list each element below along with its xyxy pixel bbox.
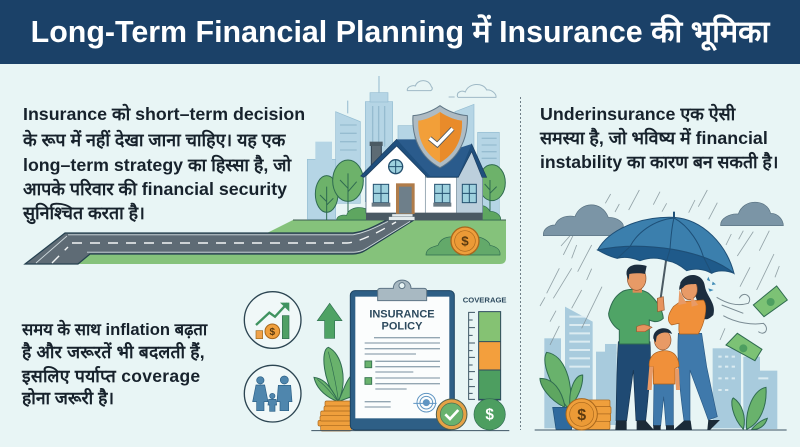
lawn and road — [25, 220, 506, 264]
illustration: family under umbrella in rain: $ — [577, 407, 586, 424]
text block: left bottom: होना जरूरी है। — [22, 388, 114, 408]
flying banknotes — [726, 286, 787, 361]
seal — [413, 393, 437, 412]
text block: left bottom: इसलिए पर्याप्त coverage — [22, 366, 200, 386]
icon: up arrow — [317, 303, 342, 338]
text block: left bottom — [22, 320, 208, 408]
skyline — [307, 93, 499, 219]
text block: right top: Underinsurance एक ऐसी — [540, 104, 735, 124]
text block: left top: Insurance को short–term decision — [23, 104, 305, 124]
coin stack — [318, 401, 352, 431]
text block: right top: instability का कारण बन सकती है। — [540, 152, 778, 172]
check badge — [436, 399, 467, 430]
skyline — [544, 307, 777, 429]
child — [647, 328, 680, 430]
text block: left top: के रूप में नहीं देखा जाना चाहिए। यह एक — [23, 130, 285, 150]
illustration: growth and family icons, clipboard and coverage gauge — [244, 280, 509, 431]
illustration: family under umbrella in rain — [535, 190, 787, 430]
trees — [315, 160, 505, 220]
woman — [668, 275, 720, 430]
text block: left bottom: है और जरूरतें भी बदलती हैं, — [22, 342, 205, 362]
wind lines — [717, 294, 766, 333]
clipboard — [350, 291, 454, 430]
title: Long-Term Financial Planning में Insurance की भूमिका — [31, 15, 769, 49]
icon: family — [244, 365, 301, 422]
gauge — [479, 312, 501, 342]
clouds — [407, 81, 496, 97]
icon: growth chart — [244, 292, 301, 348]
coverage label: COVERAGE — [463, 295, 507, 304]
potted plant — [540, 352, 583, 429]
illustration: growth and family icons, clipboard and coverage gauge: $ — [485, 407, 494, 424]
illustration: house with shield and skyline: $ — [461, 234, 469, 249]
coin and bush — [426, 236, 500, 255]
text block: left top: आपके परिवार की financial security — [23, 179, 287, 199]
coin stack — [587, 400, 611, 429]
bushes — [337, 208, 379, 220]
illustration: house with shield and skyline — [307, 76, 505, 255]
house body — [366, 145, 425, 213]
text block: left bottom: समय के साथ inflation बढ़ता — [22, 320, 207, 339]
umbrella — [598, 212, 734, 298]
shield — [413, 106, 467, 168]
text block: left top — [22, 104, 305, 224]
text block: right top: समस्या है, जो भविष्य में financial — [540, 128, 768, 148]
clouds — [543, 205, 623, 236]
chimney — [371, 145, 381, 168]
plant — [314, 347, 352, 402]
policy text: INSURANCE — [369, 309, 435, 321]
illustration: growth and family icons, clipboard and coverage gauge: POLICY — [382, 321, 423, 333]
windows and door — [389, 160, 403, 174]
ground line — [311, 429, 509, 432]
text block: right top — [540, 104, 778, 172]
text block: left top: long–term strategy का हिस्सा है, जो — [23, 155, 291, 175]
ruler — [469, 312, 475, 399]
icon: growth chart: $ — [270, 327, 276, 338]
title banner — [0, 0, 800, 64]
roof — [361, 139, 487, 177]
rain — [540, 190, 779, 345]
text block: left top: सुनिश्चित करता है। — [23, 203, 145, 223]
man — [609, 265, 664, 430]
ground line — [535, 428, 787, 431]
right plant — [732, 387, 767, 429]
